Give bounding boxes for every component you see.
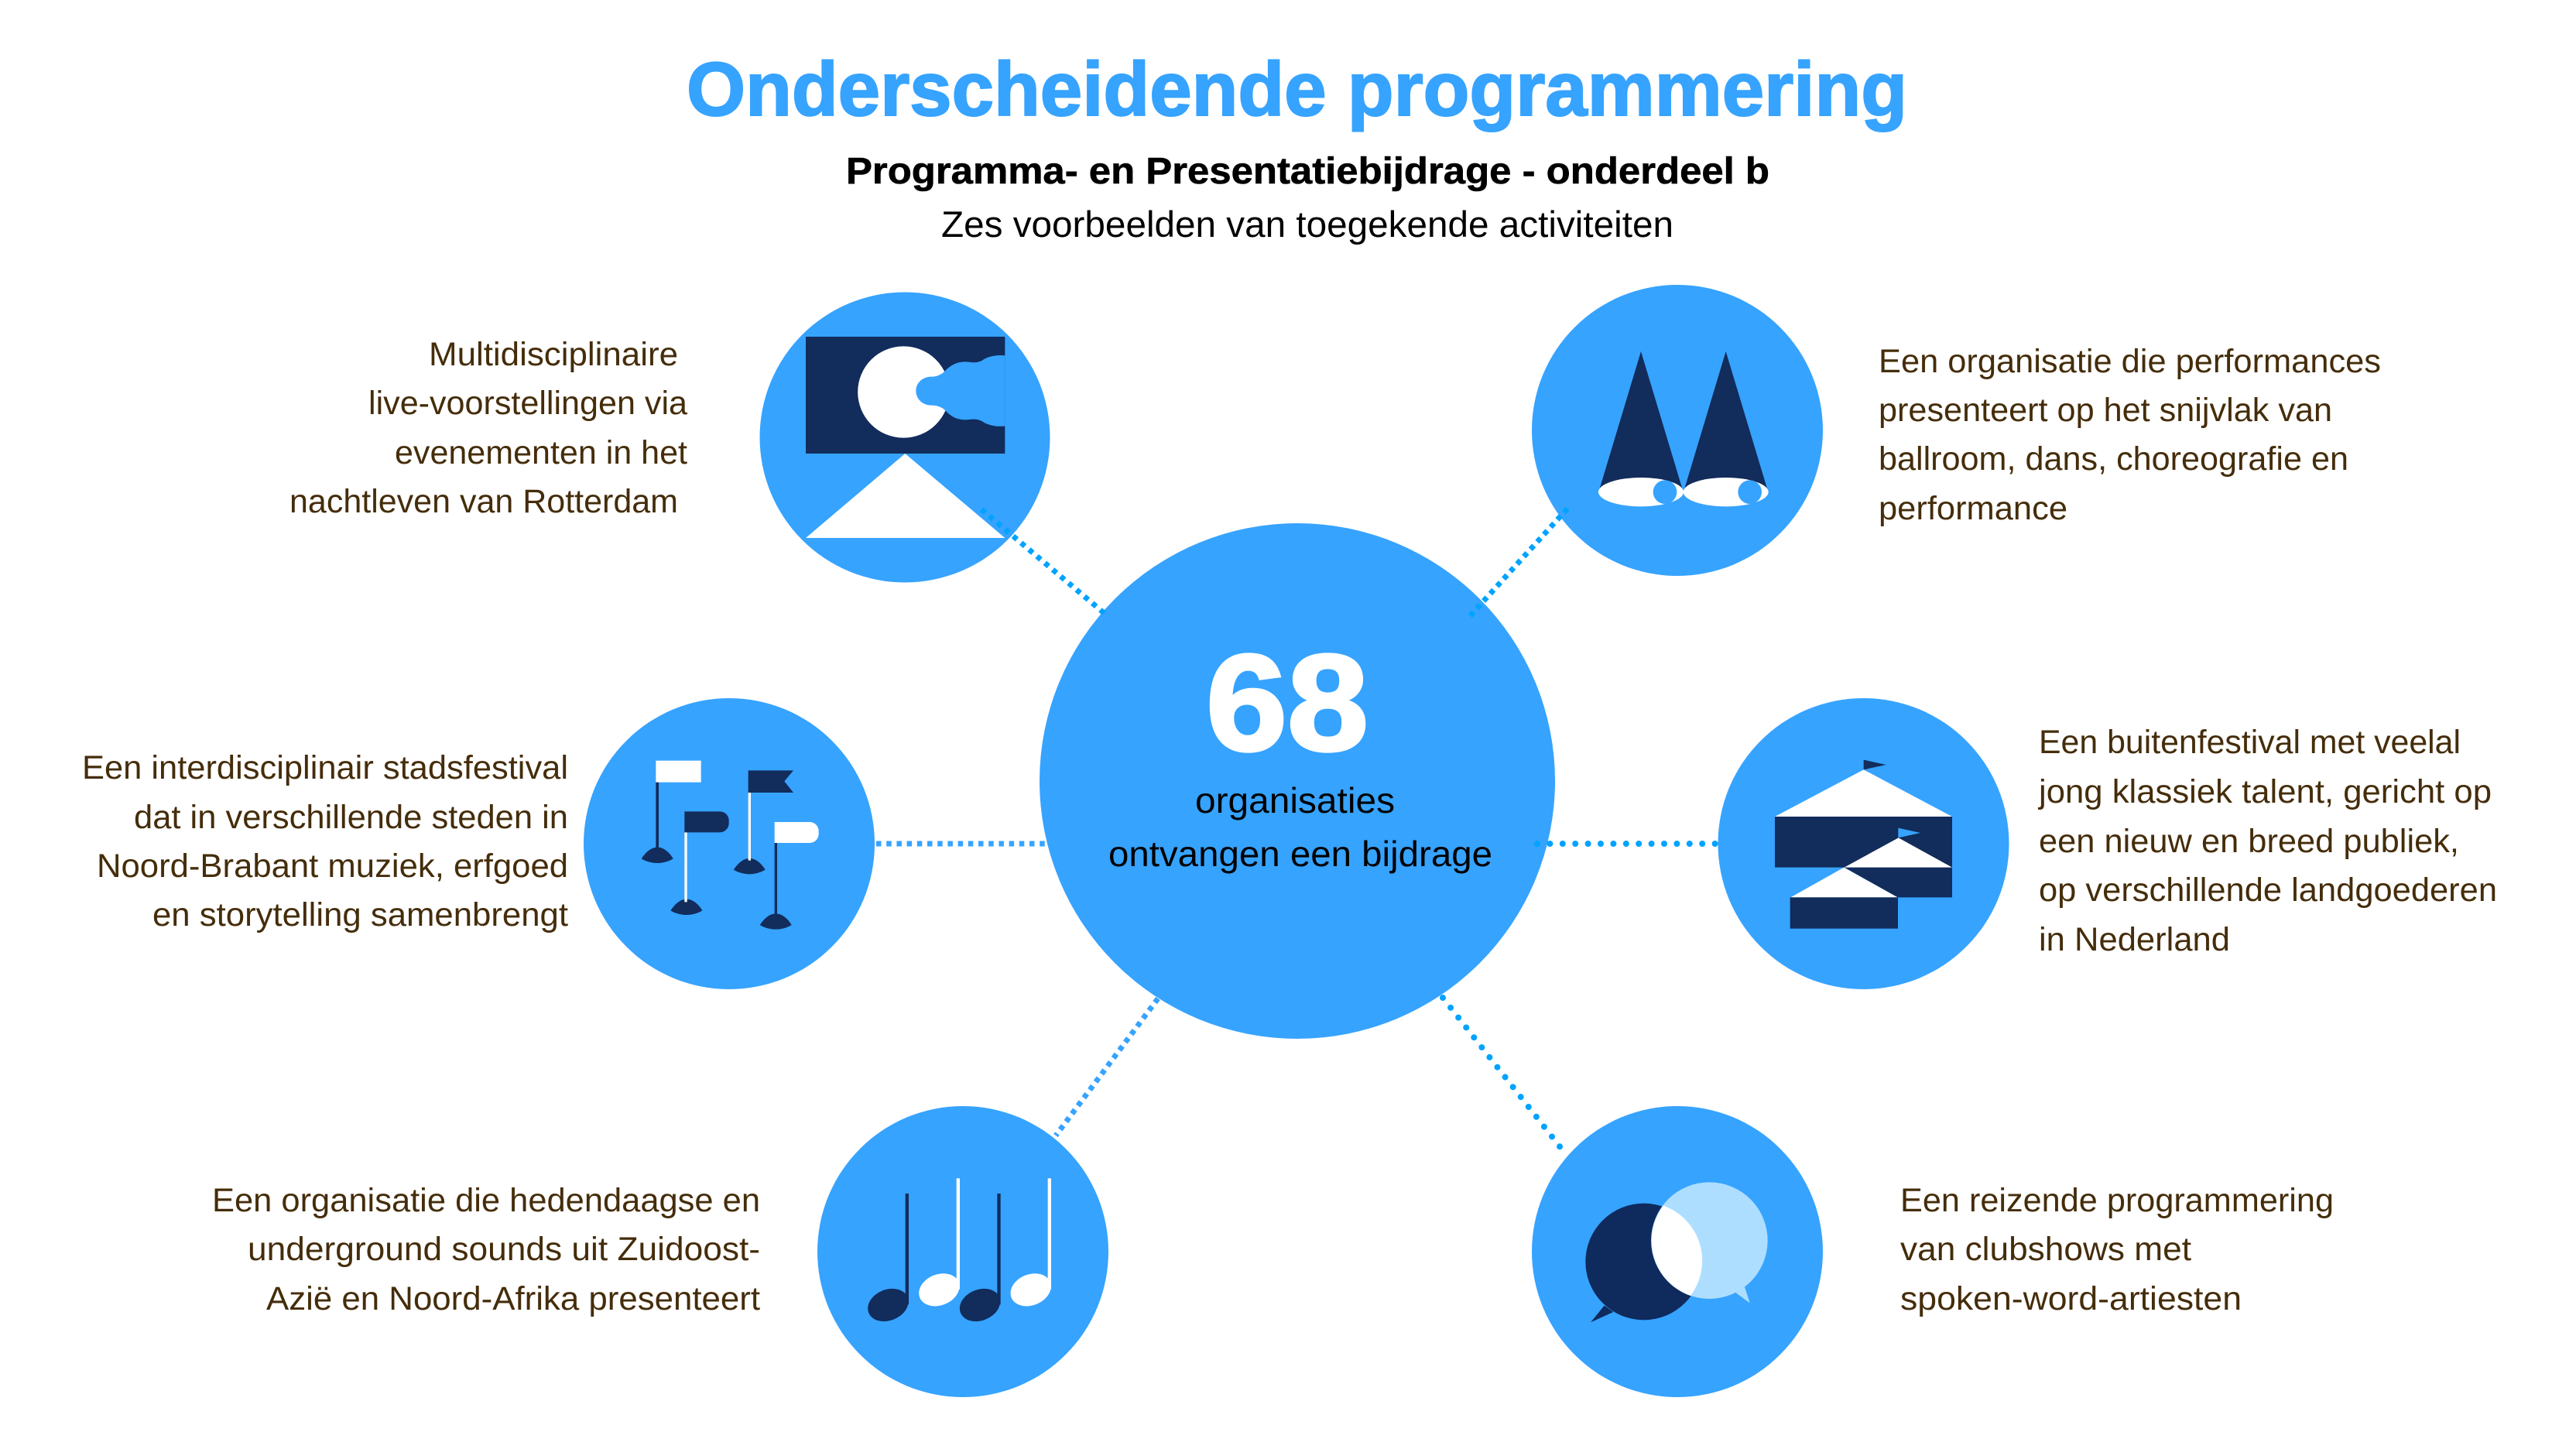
panel: outdoor festival bbox=[1718, 698, 2497, 989]
text: city festival: en storytelling samenbrengt bbox=[152, 896, 568, 933]
text: nightlife performances: nachtleven van Rotterdam bbox=[289, 483, 678, 520]
panel: ballroom performances bbox=[1532, 285, 2381, 576]
text: underground sounds bbox=[212, 1182, 760, 1317]
connector: centre to top right bbox=[1470, 509, 1567, 616]
text: spoken word: spoken-word-artiesten bbox=[1900, 1280, 2242, 1317]
icon: four flags bbox=[584, 698, 875, 989]
icon: moon, cloud and mountain bbox=[760, 293, 1050, 582]
text: nightlife performances: live-voorstellingen via bbox=[368, 385, 687, 422]
text: nightlife performances bbox=[289, 336, 687, 520]
title: Onderscheidende programmering bbox=[687, 46, 1907, 132]
text: city festival bbox=[82, 749, 568, 933]
text: underground sounds: Een organisatie die hedendaagse en bbox=[212, 1182, 760, 1219]
panel: nightlife performances bbox=[289, 293, 1050, 582]
panel: underground sounds bbox=[212, 1106, 1108, 1397]
text: city festival: Noord-Brabant muziek, erfgoed bbox=[97, 848, 568, 885]
text: ballroom performances: presenteert op het snijvlak van bbox=[1879, 392, 2332, 429]
icon: speech bubbles bbox=[1532, 1106, 1823, 1397]
text: underground sounds: Azië en Noord-Afrika presenteert bbox=[266, 1280, 760, 1317]
text: outdoor festival: een nieuw en breed publiek, bbox=[2039, 823, 2459, 860]
text: outdoor festival: jong klassiek talent, gericht op bbox=[2037, 773, 2492, 810]
connector: centre to bottom left bbox=[1056, 999, 1158, 1136]
panel: spoken word bbox=[1532, 1106, 2334, 1397]
label: ontvangen een bijdrage: ontvangen een bijdrage bbox=[1108, 834, 1492, 874]
icon: spotlights and eyes bbox=[1532, 285, 1823, 576]
text: city festival: Een interdisciplinair stadsfestival bbox=[82, 749, 568, 786]
subtitle: Programma- en Presentatiebijdrage - onderdeel b bbox=[846, 151, 1769, 192]
connector: centre to left bbox=[876, 841, 1051, 847]
text: outdoor festival: op verschillende landgoederen bbox=[2039, 872, 2497, 909]
text: spoken word bbox=[1900, 1182, 2334, 1317]
text: nightlife performances: evenementen in het bbox=[395, 434, 687, 471]
text: spoken word: Een reizende programmering bbox=[1900, 1182, 2334, 1219]
connector: centre to top left bbox=[981, 509, 1108, 616]
icon: festival tents bbox=[1718, 698, 2009, 989]
text: outdoor festival bbox=[2037, 724, 2497, 958]
text: outdoor festival: Een buitenfestival met veelal bbox=[2039, 724, 2461, 761]
number 68: 68 bbox=[1206, 626, 1368, 779]
text: ballroom performances bbox=[1879, 343, 2381, 527]
header bbox=[687, 46, 1907, 245]
connector: centre to right bbox=[1537, 841, 1717, 847]
central circle bbox=[1040, 523, 1555, 1039]
panel: city festival bbox=[82, 698, 875, 989]
intro line: Zes voorbeelden van toegekende activiteiten bbox=[941, 204, 1673, 245]
text: ballroom performances: performance bbox=[1879, 490, 2067, 527]
text: ballroom performances: Een organisatie die performances bbox=[1879, 343, 2381, 380]
icon: music notes bbox=[817, 1106, 1108, 1397]
text: nightlife performances: Multidisciplinaire bbox=[429, 336, 678, 373]
connector: centre to bottom right bbox=[1443, 998, 1562, 1149]
text: ballroom performances: ballroom, dans, choreografie en bbox=[1879, 440, 2348, 478]
text: spoken word: van clubshows met bbox=[1900, 1231, 2191, 1268]
label: organisaties: organisaties bbox=[1195, 780, 1395, 820]
text: outdoor festival: in Nederland bbox=[2039, 921, 2230, 958]
text: city festival: dat in verschillende steden in bbox=[134, 799, 568, 836]
text: underground sounds: underground sounds uit Zuidoost- bbox=[248, 1231, 760, 1268]
